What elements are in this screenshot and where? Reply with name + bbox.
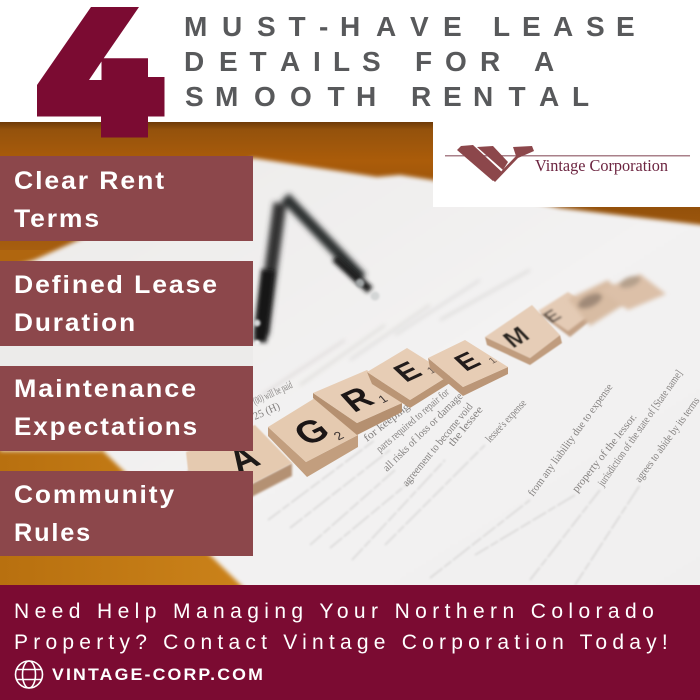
item: Maintenance Expectations: [0, 366, 253, 451]
item: Clear Rent Terms: Terms: [14, 205, 101, 233]
document text: in focus: 25 (H): [251, 400, 282, 423]
document text lines: faint lower: [268, 440, 640, 585]
item: Defined Lease Duration: Defined Lease: [14, 271, 219, 299]
document text: in focus: parts required to repair for: [374, 386, 452, 455]
item: Maintenance Expectations: Maintenance: [14, 375, 198, 403]
logo rule: [445, 155, 690, 156]
document text: in focus: (00) will be paid: [251, 379, 295, 408]
icon: globe: [16, 661, 42, 688]
document text: in focus: from any liability due to expense: [526, 382, 615, 499]
tile E second: 1: [487, 356, 500, 366]
title: [184, 11, 635, 112]
tile A: A: [221, 437, 267, 480]
document text: in focus: lessee's expense: [483, 397, 529, 445]
tile R: 1: [375, 392, 391, 406]
item: Community Rules: Rules: [14, 519, 92, 547]
item: Maintenance Expectations: Expectations: [14, 413, 199, 441]
tile E: [367, 348, 450, 408]
logo panel: [433, 122, 700, 207]
title: DETAILS FOR A: [184, 46, 554, 77]
document text lines: upper blur: [262, 270, 530, 395]
item: Clear Rent Terms: [0, 156, 253, 241]
tile M: [485, 305, 562, 365]
item: Community Rules: [0, 471, 253, 556]
tile R: [313, 370, 402, 435]
document text: in focus: agreement to become void: [400, 401, 476, 489]
paper sheets: [20, 154, 700, 585]
footer band: [0, 585, 700, 700]
document text: in focus: for keeping: [361, 401, 412, 444]
call to action: Property? Contact Vintage Corporation Today!: [14, 631, 673, 654]
tile M: M: [498, 322, 535, 353]
wood table: [0, 122, 700, 252]
white header band: [0, 0, 700, 122]
tile G: 2: [330, 429, 347, 443]
tile E: E: [387, 356, 429, 387]
tile T: [601, 274, 666, 310]
tile E second: E: [448, 347, 487, 376]
document text: in focus: [251, 368, 700, 499]
letter tiles: [186, 274, 666, 503]
document text: in focus: the lessee: [446, 404, 486, 449]
item: Community Rules: Community: [14, 481, 176, 509]
website: VINTAGE-CORP.COM: [52, 666, 265, 684]
photo: lease agreement with letter tiles: [0, 122, 700, 585]
title: SMOOTH RENTAL: [185, 81, 589, 112]
document text: in focus: all risks of loss or damage: [381, 390, 465, 474]
tile E: 1: [425, 365, 439, 376]
tile E third: E: [539, 306, 566, 327]
title: MUST-HAVE LEASE: [184, 11, 635, 42]
item: Defined Lease Duration: Duration: [14, 309, 137, 337]
call to action: Need Help Managing Your Northern Colorado: [14, 600, 659, 623]
document text: in focus: property of the lessor.: [570, 411, 640, 495]
tile N: [568, 280, 628, 326]
item: Defined Lease Duration: [0, 261, 253, 346]
pens: [254, 197, 380, 346]
tile E second: [428, 340, 508, 396]
item: Clear Rent Terms: Clear Rent: [14, 167, 166, 195]
tile A: [186, 425, 292, 503]
logo name: Vintage Corporation: [535, 156, 668, 175]
tile G: G: [286, 411, 338, 452]
logo mark: [457, 145, 534, 182]
call to action: [14, 600, 673, 654]
tile G: [268, 398, 358, 477]
tile E third: [538, 292, 596, 337]
big number 4: [37, 7, 164, 138]
tile R: R: [334, 380, 381, 419]
